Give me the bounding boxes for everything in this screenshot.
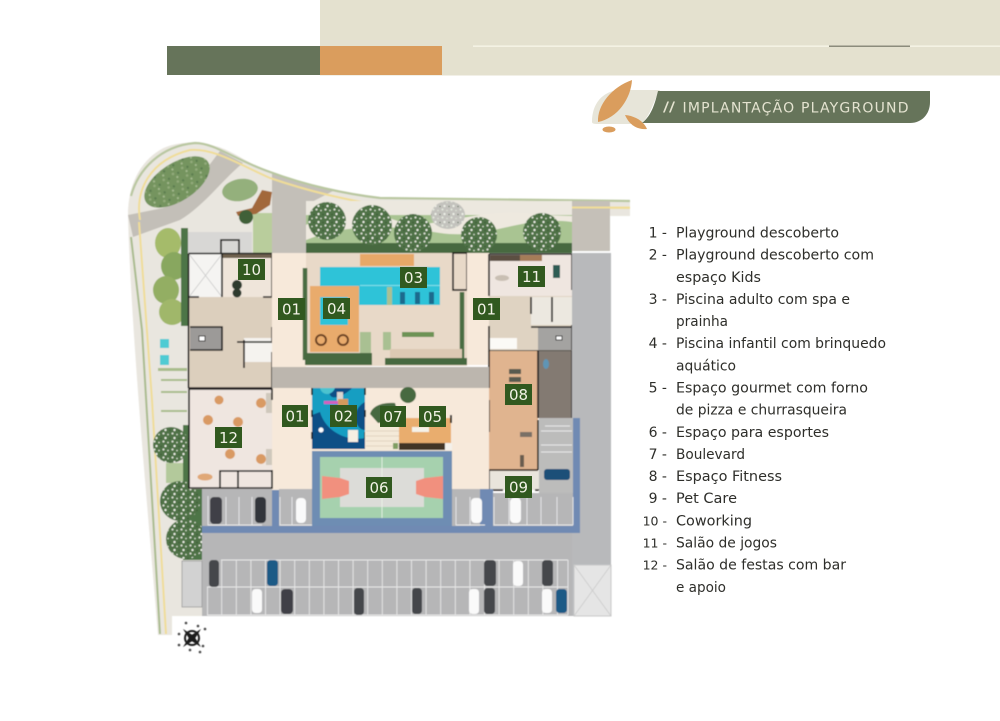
- legend numbers: 10 -: [643, 513, 667, 528]
- legend entries: Pet Care: [676, 491, 737, 507]
- legend numbers: 5 -: [649, 380, 667, 396]
- party hall: [189, 389, 272, 489]
- label 01 upper right: 01: [477, 300, 496, 318]
- left trees: [153, 228, 188, 326]
- label 06: [366, 477, 392, 498]
- label 05: 05: [423, 408, 442, 426]
- label 03: [400, 267, 427, 288]
- fitness and dark room: [489, 351, 572, 471]
- legend numbers: 8 -: [649, 469, 667, 485]
- label 01 upper right: [473, 298, 500, 320]
- legend entries: [676, 226, 886, 596]
- east parking: [539, 418, 580, 533]
- compass: [178, 622, 206, 653]
- label 05: [419, 406, 446, 427]
- label 07: [380, 406, 406, 427]
- legend entries: Espaço para esportes: [676, 425, 829, 441]
- legend entries: Piscina infantil com brinquedo: [676, 336, 886, 352]
- label 04: [323, 298, 350, 319]
- legend numbers: 6 -: [649, 425, 667, 441]
- section title banner: IMPLANTAÇÃO PLAYGROUND: [682, 100, 908, 116]
- icon: leaves: [592, 80, 660, 132]
- building: games room wing: [489, 254, 572, 351]
- legend entries: Boulevard: [676, 447, 745, 463]
- label 02: [330, 405, 357, 427]
- legend entries: e apoio: [676, 580, 726, 596]
- left green edge: [131, 237, 160, 634]
- court paving: [272, 253, 306, 367]
- building: coworking wing: [188, 232, 272, 388]
- roundabout garden: [136, 146, 218, 218]
- label 07: 07: [383, 408, 403, 426]
- legend entries: Coworking: [676, 513, 752, 529]
- banner heading: //: [663, 100, 676, 116]
- label 01 lower: [282, 405, 308, 427]
- legend: [643, 226, 886, 596]
- garden strip: [306, 201, 572, 253]
- pool deck: [305, 253, 467, 366]
- legend entries: Salão de festas com bar: [676, 558, 846, 574]
- label 08: [505, 384, 532, 405]
- playground 02: [312, 388, 365, 449]
- corner road block: [572, 201, 610, 251]
- legend entries: Espaço gourmet com forno: [676, 380, 868, 396]
- road: roundabout band: [128, 151, 243, 237]
- lower-left trees: [153, 425, 206, 560]
- legend entries: espaço Kids: [676, 270, 761, 286]
- sports court 06: [312, 451, 452, 526]
- accessible parking markers: [158, 339, 187, 412]
- legend numbers: 2 -: [649, 248, 667, 264]
- lower paving: [272, 388, 489, 490]
- legend numbers: 3 -: [649, 292, 667, 308]
- road marking yellow: [139, 150, 630, 634]
- label 06: 06: [369, 479, 389, 497]
- gourmet area: [399, 415, 452, 450]
- label 01 lower: 01: [285, 408, 305, 426]
- legend entries: Salão de jogos: [676, 536, 777, 552]
- label 12: [215, 427, 242, 448]
- road stripe east end: [572, 206, 630, 208]
- right paving: [467, 253, 489, 365]
- header band: [167, 0, 1000, 76]
- label 03: 03: [404, 269, 423, 287]
- legend numbers: 7 -: [649, 447, 667, 463]
- legend entries: Playground descoberto: [676, 226, 839, 242]
- label 10: 10: [242, 261, 261, 279]
- promenade: [272, 367, 489, 388]
- legend entries: de pizza e churrasqueira: [676, 403, 847, 419]
- label 09: 09: [509, 478, 528, 496]
- legend numbers: 9 -: [649, 491, 667, 507]
- legend entries: aquático: [676, 358, 736, 374]
- legend numbers: 11 -: [643, 536, 667, 550]
- boulevard stairs and tree: [365, 387, 416, 450]
- small lawn: [220, 176, 260, 204]
- label 11: 11: [522, 268, 541, 286]
- main parking: [202, 489, 580, 616]
- label 01 upper left: 01: [282, 300, 301, 318]
- road edge green: [131, 143, 630, 201]
- legend entries: prainha: [676, 314, 728, 330]
- legend numbers: 1 -: [649, 226, 667, 242]
- east grey lot: [572, 253, 611, 616]
- legend numbers: 12 -: [643, 558, 667, 573]
- label 11: [518, 266, 545, 287]
- legend numbers: 4 -: [649, 336, 667, 352]
- zone labels: [215, 259, 545, 498]
- shrub: grey sculpture: [431, 201, 465, 229]
- label 09: [505, 476, 532, 498]
- legend entries: Piscina adulto com spa e: [676, 292, 850, 308]
- legend entries: Espaço Fitness: [676, 469, 782, 485]
- legend numbers: [643, 226, 667, 573]
- site ground: [128, 143, 630, 635]
- label 10: [238, 259, 265, 280]
- banner bar: [642, 91, 930, 123]
- void box: [574, 565, 611, 616]
- cars: [209, 497, 567, 615]
- section title banner: [592, 80, 930, 132]
- label 02: 02: [334, 408, 353, 426]
- road: side street: [272, 173, 333, 253]
- site plan: [128, 143, 630, 653]
- lawn and planter: [236, 190, 272, 253]
- label 12: 12: [219, 429, 238, 447]
- label 04: 04: [327, 300, 346, 318]
- legend entries: Playground descoberto com: [676, 248, 874, 264]
- label 08: 08: [509, 386, 528, 404]
- trees: [308, 202, 561, 253]
- service room: [182, 561, 202, 607]
- label 01 upper left: [278, 298, 305, 320]
- pet care room: [489, 470, 542, 490]
